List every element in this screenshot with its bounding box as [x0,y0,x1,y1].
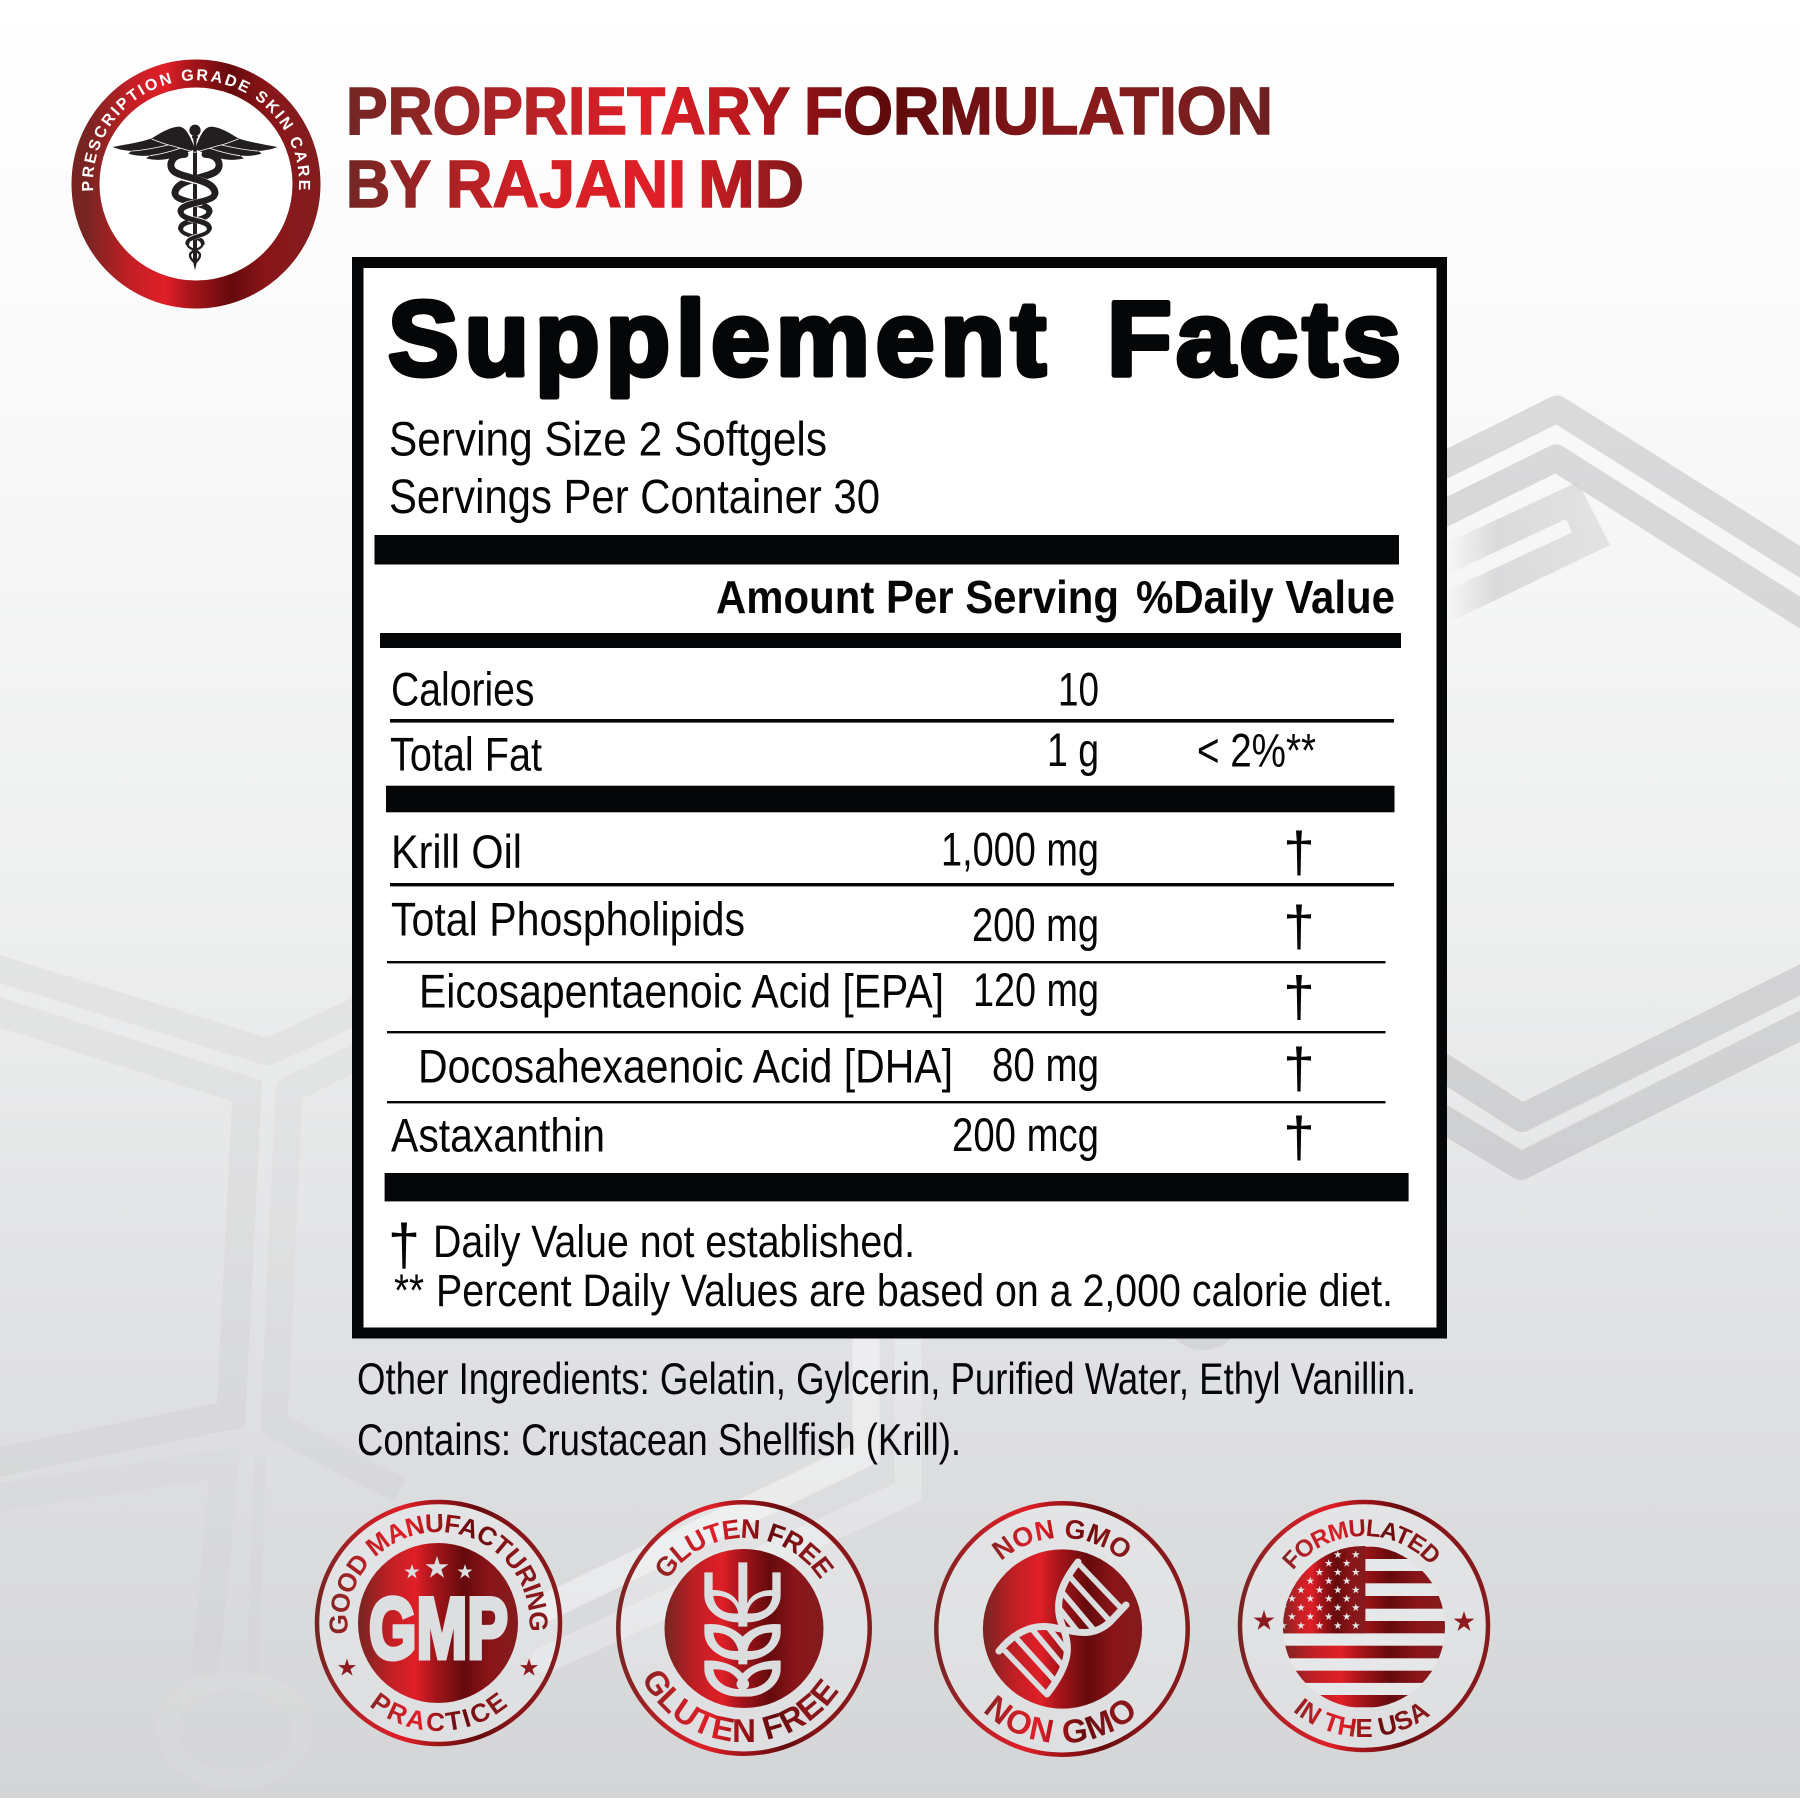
text: other ingredients: Other Ingredients: Gelatin, Gylcerin, Purified Water, Ethyl Vanillin. [357,1355,1416,1404]
gluten free text top: GLUTEN FREE [656,1519,834,1579]
USA ring [1240,1502,1488,1750]
GMP ring [317,1502,560,1744]
column headers: Amount Per Serving [716,571,1119,623]
row: total fat: Total Fat [390,728,542,780]
footnote: percent daily values: ** [394,1265,424,1316]
icon: USA flag [1279,1546,1447,1708]
logo: prescription grade skin care seal [72,60,320,308]
row: total phospholipids: 200 mg [972,898,1099,951]
row: EPA: 120 mg [973,963,1099,1016]
row: astaxanthin [391,1106,1315,1170]
row: calories: Calories [391,662,534,716]
row: calories [391,662,1099,716]
row divider [390,719,1394,723]
badge: gluten free [616,1500,872,1756]
row: astaxanthin: 200 mcg [952,1108,1099,1161]
GMP ring text bottom: PRACTICE [370,1692,508,1732]
badge: GMP [314,1500,562,1746]
row: total phospholipids: Total Phospholipids [391,892,745,946]
serving size: Serving Size 2 Softgels [389,414,827,466]
non GMO text bottom: NON GMO [984,1695,1134,1743]
title line 2: RAJANI [446,147,686,222]
title line 1: PROPRIETARY [346,74,790,149]
row: krill oil: Krill Oil [391,825,522,878]
icon: caduceus [113,125,277,270]
GMP letters: GMP [369,1581,508,1677]
gluten free ring [618,1502,870,1754]
GMP stars [404,1556,473,1578]
row: DHA: † [1283,1037,1315,1101]
row: total fat [390,723,1316,780]
row divider [387,1101,1386,1103]
thick divider 1 [374,535,1399,564]
GMP ring text top: GOOD MANUFACTURING [329,1514,548,1634]
row divider [387,1031,1386,1033]
row: EPA: Eicosapentaenoic Acid [EPA] [419,964,944,1018]
thick divider 3 [386,786,1394,812]
table background [364,268,1436,1328]
footnote: daily value: † [388,1213,420,1278]
icon: DNA helix [999,1562,1126,1694]
row: DHA: Docosahexaenoic Acid [DHA] [418,1040,953,1092]
badge: non GMO [934,1501,1190,1757]
column headers: %Daily Value [1136,571,1395,623]
title line 2: BY [346,147,431,222]
servings per container: Servings Per Container 30 [389,471,880,524]
title line 1: FORMULATION [804,74,1273,149]
gluten free text bottom: GLUTEN FREE [645,1671,839,1742]
row: astaxanthin: Astaxanthin [391,1108,605,1162]
row: EPA [419,963,1315,1029]
heading: supplement facts: Facts [1107,280,1401,398]
non GMO disc [983,1549,1142,1709]
row: krill oil: 1,000 mg [941,822,1099,876]
row: total phospholipids [391,892,1315,959]
thick divider 4 [385,1173,1409,1201]
thick divider 2 [380,633,1401,648]
row: total fat: < 2%** [1197,724,1316,776]
logo ring [86,74,306,294]
GMP disc [358,1543,518,1703]
row divider [390,883,1394,886]
badge: formulated in the USA [1238,1500,1490,1752]
non GMO ring [936,1503,1188,1755]
icon: wheat [704,1562,781,1697]
gluten free disc [664,1549,824,1708]
row: DHA: 80 mg [992,1038,1099,1091]
non GMO text top: NON GMO [991,1520,1130,1560]
GMP side stars [338,1658,538,1676]
USA text bottom: IN THE USA [1294,1698,1430,1737]
row divider [387,961,1386,963]
row: astaxanthin: † [1283,1106,1315,1170]
footnote: percent daily values: Percent Daily Values are based on a 2,000 calorie diet. [436,1265,1393,1316]
title [346,74,1273,222]
row: total fat: 1 g [1047,723,1099,776]
background hexagon pattern [0,409,1800,1780]
panel: supplement facts table [352,257,1447,1338]
row: EPA: † [1283,965,1315,1029]
USA text top: FORMULATED [1282,1519,1439,1570]
row: DHA [418,1037,1315,1101]
table border [352,257,1447,1338]
row: calories: 10 [1058,662,1099,716]
row: krill oil [391,821,1315,885]
footnote: daily value: Daily Value not established. [433,1216,915,1267]
row: total phospholipids: † [1283,895,1315,959]
heading: supplement facts: Supplement [388,280,1046,398]
text: contains allergen: Contains: Crustacean Shellfish (Krill). [357,1416,961,1465]
logo ring text: PRESCRIPTION GRADE SKIN CARE [82,69,310,191]
title line 2: MD [698,147,804,222]
USA side stars [1254,1610,1474,1631]
row: krill oil: † [1283,821,1315,885]
